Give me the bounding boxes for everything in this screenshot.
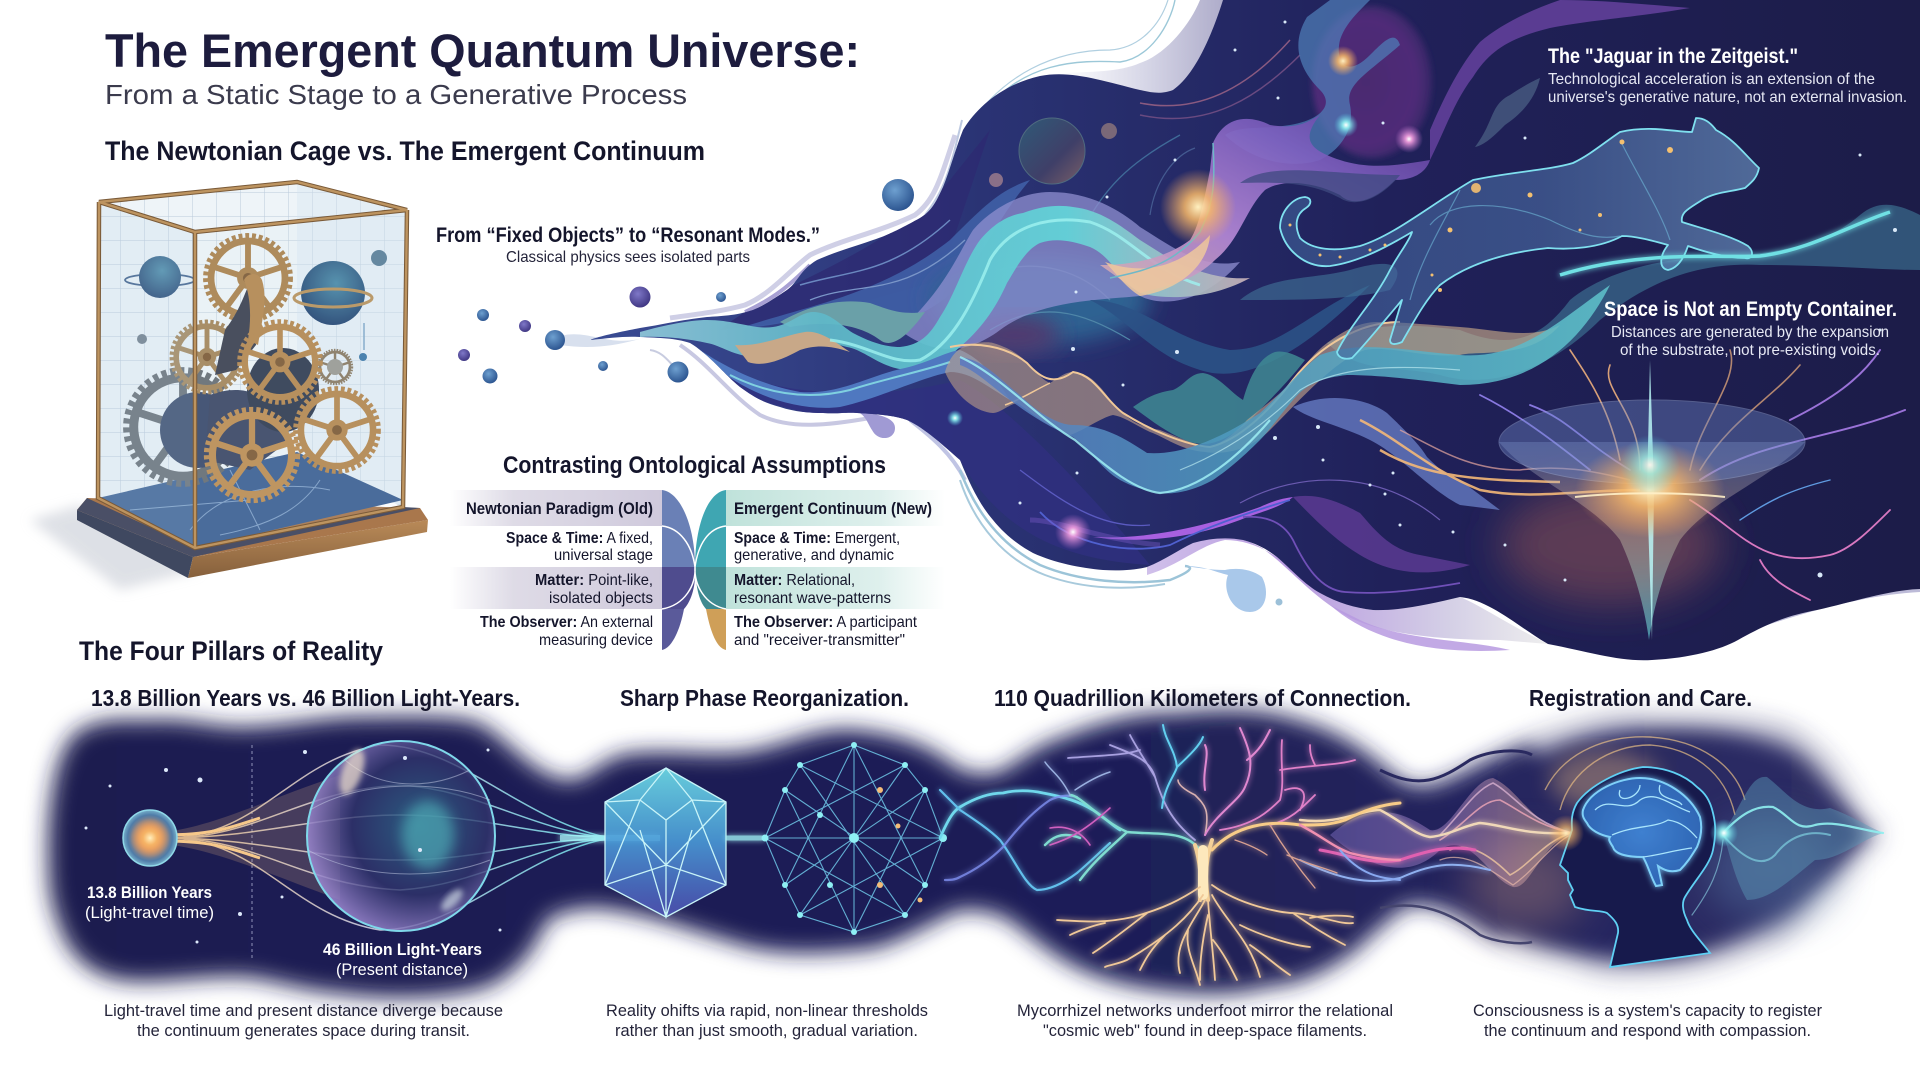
comparison table: contrasting ontological assumptions: Contrasting Ontological Assumptions bbox=[503, 452, 886, 479]
right column: and "receiver-transmitter" bbox=[734, 632, 905, 649]
panel: dark continuum band bbox=[48, 710, 1883, 998]
lavender band to orange bbox=[1100, 115, 1430, 293]
glows bbox=[947, 46, 1423, 550]
pillar descriptions: "cosmic web" found in deep-space filaments. bbox=[1043, 1021, 1367, 1040]
pillar titles: Sharp Phase Reorganization. bbox=[620, 685, 909, 711]
left central lobe bbox=[662, 490, 695, 650]
pillar titles: 110 Quadrillion Kilometers of Connection. bbox=[994, 685, 1411, 711]
green mound bbox=[780, 301, 925, 343]
purple orb cloud bbox=[1312, 6, 1432, 158]
brain bbox=[1583, 778, 1701, 886]
pillar one labels: 46 Billion Light-Years bbox=[323, 940, 482, 959]
text: fixed objects to resonant modes: From “Fixed Objects” to “Resonant Modes.” bbox=[436, 224, 820, 247]
text: space is not an empty container: of the substrate, not pre-existing voids. bbox=[1620, 342, 1880, 359]
right column bbox=[734, 500, 932, 649]
lavender edge strips and thin lines bbox=[670, 0, 1920, 651]
panel: flowing cosmic field bbox=[580, 0, 1920, 680]
mid blue bands bbox=[1090, 285, 1370, 374]
purple ribbon top right bbox=[1430, 0, 1690, 160]
text: fixed objects to resonant modes bbox=[436, 224, 820, 266]
pillar descriptions bbox=[104, 1001, 1822, 1040]
lightning around funnel bbox=[1480, 350, 1905, 600]
text: space is not an empty container bbox=[1604, 298, 1897, 359]
jaguar made of light bbox=[1280, 118, 1759, 359]
illustration: glass cage of gears bbox=[30, 182, 428, 590]
landing cyan edge bbox=[1560, 212, 1890, 275]
left column: universal stage bbox=[554, 547, 653, 564]
silhouette bbox=[1560, 767, 1715, 967]
pillar descriptions: Reality ohifts via rapid, non-linear thresholds bbox=[606, 1001, 928, 1020]
right column: Space & Time: Emergent, bbox=[734, 530, 900, 547]
pillar descriptions: Consciousness is a system's capacity to register bbox=[1473, 1001, 1822, 1020]
soft light fade around head bbox=[1380, 711, 1895, 978]
text: space is not an empty container: Distances are generated by the expansion bbox=[1611, 324, 1889, 341]
heading: four pillars of reality: The Four Pillars of Reality bbox=[79, 636, 383, 666]
pillar one labels: 13.8 Billion Years bbox=[87, 883, 212, 902]
right column: Emergent Continuum (New) bbox=[734, 500, 932, 518]
left column: The Observer: An external bbox=[480, 614, 653, 631]
pillar descriptions: the continuum generates space during transit. bbox=[137, 1021, 470, 1040]
right column: Matter: Relational, bbox=[734, 572, 855, 589]
pillar descriptions: the continuum and respond with compassion. bbox=[1484, 1021, 1811, 1040]
pillar descriptions: Light-travel time and present distance diverge because bbox=[104, 1001, 503, 1020]
pillar descriptions: Mycorrhizel networks underfoot mirror the relational bbox=[1017, 1001, 1393, 1020]
text: fixed objects to resonant modes: Classical physics sees isolated parts bbox=[506, 249, 750, 266]
pillar titles bbox=[91, 685, 1752, 711]
pillar one labels bbox=[85, 883, 482, 979]
pillar one labels: (Present distance) bbox=[336, 960, 468, 979]
heading: Newtonian cage vs emergent continuum: The Newtonian Cage vs. The Emergent Continuum bbox=[105, 136, 705, 166]
blue wisp in cloud bbox=[1280, 0, 1400, 156]
grey wisp bbox=[1475, 78, 1540, 147]
connecting waves bbox=[940, 790, 1120, 890]
trunk bbox=[1195, 840, 1212, 900]
right column: resonant wave-patterns bbox=[734, 590, 891, 607]
text: jaguar in the zeitgeist: The "Jaguar in the Zeitgeist." bbox=[1548, 45, 1798, 68]
teal mound bbox=[1133, 352, 1305, 444]
funnel of expanding space bbox=[1499, 360, 1805, 640]
pillar titles: Registration and Care. bbox=[1529, 685, 1752, 711]
left column: measuring device bbox=[539, 632, 653, 649]
landing ribbon bbox=[1327, 205, 1920, 380]
left column: Matter: Point-like, bbox=[535, 572, 653, 589]
pillar two: crystal and network bbox=[605, 742, 947, 935]
pillar four: head silhouette with brain bbox=[1545, 737, 1883, 967]
outgoing wave bbox=[1548, 777, 1883, 915]
lavender envelope behind teal ribbon bbox=[900, 192, 1240, 349]
main teal ribbon bbox=[640, 206, 1250, 370]
right central lobe bbox=[695, 490, 726, 650]
thin arcs bbox=[800, 40, 1300, 340]
canopy bbox=[1045, 725, 1400, 888]
pillar one labels: (Light-travel time) bbox=[85, 903, 214, 922]
right column: The Observer: A participant bbox=[734, 614, 918, 631]
gold crossing to funnel bbox=[1360, 420, 1640, 494]
text: jaguar in the zeitgeist: universe's generative nature, not an external invasion. bbox=[1548, 89, 1907, 106]
subtitle: From a Static Stage to a Generative Process bbox=[105, 79, 687, 110]
right column: generative, and dynamic bbox=[734, 547, 894, 564]
purple swooshes bbox=[1020, 470, 1470, 593]
pillar descriptions: rather than just smooth, gradual variation. bbox=[615, 1021, 918, 1040]
left column: Newtonian Paradigm (Old) bbox=[466, 500, 653, 518]
pillar one: orb and expanding sphere bbox=[84, 741, 660, 960]
title: The Emergent Quantum Universe: bbox=[105, 24, 860, 77]
left column: isolated objects bbox=[549, 590, 653, 607]
gold ribbon bbox=[945, 322, 1560, 453]
pillar titles: 13.8 Billion Years vs. 46 Billion Light-Years. bbox=[91, 685, 520, 711]
comparison table: contrasting ontological assumptions bbox=[450, 452, 945, 650]
text: jaguar in the zeitgeist bbox=[1548, 45, 1907, 106]
isolated particles bbox=[458, 179, 914, 384]
arcs above head bbox=[1545, 737, 1745, 815]
roots bbox=[1057, 885, 1353, 985]
pillar three: tree and mycorrhizal roots bbox=[1045, 725, 1400, 985]
star field bbox=[1018, 20, 1897, 582]
left column bbox=[466, 500, 653, 649]
text: jaguar in the zeitgeist: Technological acceleration is an extension of the bbox=[1548, 71, 1875, 88]
left column: Space & Time: A fixed, bbox=[506, 530, 653, 547]
lower blue ribbon bbox=[690, 343, 1010, 408]
ribbons into the head bbox=[1300, 778, 1572, 887]
blue swoosh bbox=[960, 285, 1610, 493]
planets bbox=[989, 118, 1117, 187]
